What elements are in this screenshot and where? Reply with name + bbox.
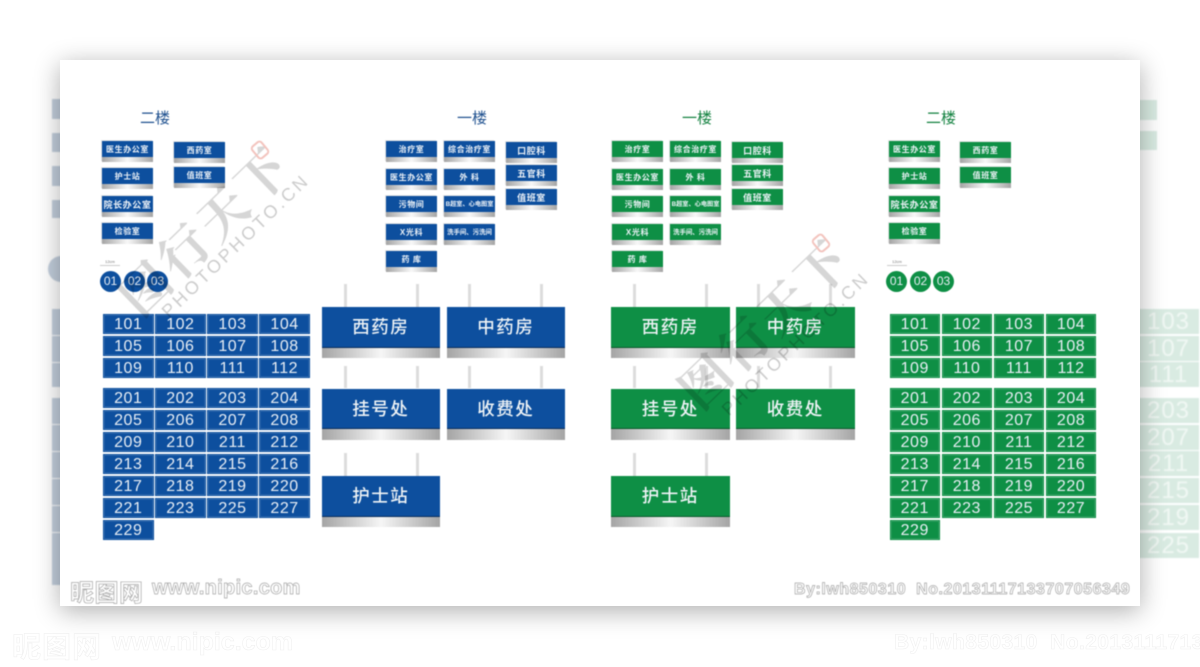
sign: 外科	[670, 169, 721, 190]
blue room numbers 101-112: 101	[114, 316, 142, 333]
panel: green second floor door signs	[888, 140, 1012, 244]
hanging sign: 护士站: 护士站	[642, 486, 699, 506]
watermark: nipic logo: www.nipic.com	[152, 577, 301, 599]
sign: B超室、心电图室	[670, 196, 721, 217]
sign: B超室、心电图室	[444, 196, 495, 217]
sign: 污物间	[386, 196, 437, 217]
sign: 医生办公室	[612, 169, 663, 190]
blue room numbers 201-229: 218	[166, 478, 194, 495]
green room numbers 101-112: 104	[1057, 316, 1085, 333]
green room numbers 201-229: 206	[953, 412, 981, 429]
green room numbers 201-229: 223	[953, 500, 981, 517]
sign: 医生办公室: 医生办公室	[390, 173, 433, 182]
badge 01: 01	[104, 274, 117, 288]
blue room numbers 201-229: 203	[218, 390, 247, 407]
blue number badges	[99, 270, 169, 293]
green room numbers 201-229: 219	[1005, 478, 1033, 495]
blue room numbers 101-112: 111	[220, 360, 245, 377]
blue room numbers 201-229	[102, 387, 311, 541]
sign: 综合治疗室: 综合治疗室	[448, 145, 491, 154]
blue room numbers 201-229: 210	[166, 434, 194, 451]
sign: 值班室: 值班室	[517, 193, 546, 203]
sign: 污物间	[612, 196, 663, 217]
sign: X光科: X光科	[400, 228, 423, 237]
sign: X光科: X光科	[626, 228, 649, 237]
heading: blue first floor: 一楼	[457, 110, 487, 127]
blue room numbers 101-112: 112	[271, 360, 298, 377]
blue room numbers 201-229: 205	[114, 412, 142, 429]
badge 03: 03	[151, 274, 164, 288]
green room numbers 201-229: 218	[953, 478, 981, 495]
heading: green first floor: 一楼	[682, 110, 712, 127]
sign: 检验室: 检验室	[902, 227, 927, 236]
sign: 五官科	[506, 165, 557, 186]
green room numbers 201-229: 208	[1057, 412, 1085, 429]
blue room numbers 201-229: 201	[114, 390, 142, 407]
blue room numbers 101-112: 106	[166, 338, 194, 355]
sign: 综合治疗室	[444, 141, 495, 162]
sign: 院长办公室: 院长办公室	[890, 200, 938, 210]
blue room numbers 201-229: 209	[114, 434, 142, 451]
badge 02: 02	[914, 274, 927, 288]
sign: 洗手间、污洗间: 洗手间、污洗间	[673, 229, 718, 236]
blue room numbers 101-112: 104	[270, 316, 299, 333]
green room numbers 201-229: 212	[1057, 434, 1085, 451]
green room numbers 101-112: 101	[901, 316, 929, 333]
hanging sign: 西药房: 西药房	[642, 317, 699, 337]
sign: 口腔科	[732, 142, 783, 163]
green room numbers 201-229: 217	[901, 478, 929, 495]
sign: 护士站	[102, 168, 153, 189]
green room numbers 201-229: 209	[901, 434, 929, 451]
blue room numbers 201-229: 211	[219, 434, 246, 451]
green room numbers 201-229: 229	[901, 522, 929, 539]
watermark: left url: PHOTOPHOTO.CN	[158, 170, 314, 321]
green room numbers 101-112: 103	[1005, 316, 1033, 333]
green room numbers 201-229: 205	[901, 412, 929, 429]
panel: green hanging signs	[610, 284, 856, 528]
hanging sign: 中药房: 中药房	[477, 317, 534, 337]
size dimension: blue 12cm	[100, 259, 120, 266]
blue room numbers 101-112	[102, 313, 311, 379]
watermark: nipic logo: 昵图网	[70, 580, 144, 607]
green room numbers 101-112: 108	[1057, 338, 1085, 355]
blue room numbers 201-229: 204	[270, 390, 299, 407]
blue room numbers 101-112: 107	[218, 338, 247, 355]
hanging sign: 收费处	[735, 388, 856, 440]
green room numbers 101-112: 111	[1006, 360, 1032, 377]
hanging sign: 收费处	[446, 388, 566, 440]
panel: white board	[60, 60, 1140, 606]
badge 01	[886, 271, 907, 292]
green room numbers 201-229: 213	[901, 456, 929, 473]
hanging sign: 挂号处	[321, 388, 441, 440]
blue room numbers 101-112: 110	[167, 360, 194, 377]
sign: 治疗室	[386, 141, 437, 162]
badge 03: 03	[937, 274, 950, 288]
hanging sign: 收费处: 收费处	[477, 398, 534, 418]
blue room numbers 201-229: 219	[218, 478, 247, 495]
sign: 医生办公室: 医生办公室	[893, 145, 936, 154]
badge 02	[124, 271, 145, 292]
sign: B超室、心电图室: B超室、心电图室	[672, 201, 719, 208]
sign: 西药室: 西药室	[973, 146, 998, 155]
green room numbers 201-229: 215	[1005, 456, 1033, 473]
hanging sign: 护士站	[321, 475, 441, 528]
sign: 口腔科: 口腔科	[517, 146, 546, 156]
hanging sign: 挂号处: 挂号处	[642, 398, 699, 418]
badge 02: 02	[128, 274, 141, 288]
heading: green second floor: 二楼	[926, 110, 956, 127]
green room numbers 101-112	[889, 313, 1097, 379]
sign: 综合治疗室: 综合治疗室	[674, 145, 717, 154]
sign: 护士站: 护士站	[115, 172, 140, 181]
background ghost: blurred green signs at right edge: 111	[1149, 361, 1188, 388]
sign: 检验室	[102, 223, 153, 244]
sign: 治疗室	[612, 141, 663, 162]
green room numbers 101-112: 102	[953, 316, 981, 333]
green room numbers 101-112: 107	[1005, 338, 1033, 355]
watermark: left brush lettering: 图行天下	[100, 128, 306, 330]
badge 03	[147, 271, 168, 292]
badge 02	[910, 271, 931, 292]
green room numbers 101-112: 105	[901, 338, 929, 355]
watermark: left seal	[249, 139, 271, 161]
sign: 院长办公室: 院长办公室	[103, 200, 152, 210]
blue room numbers 101-112: 108	[270, 338, 299, 355]
hanging sign: 西药房: 西药房	[352, 317, 409, 337]
sign: 检验室	[889, 223, 940, 244]
background ghost: blurred green signs at right edge: 203	[1147, 397, 1190, 424]
green number badges	[885, 270, 955, 293]
background ghost: blurred green signs at right edge: 215	[1147, 477, 1190, 504]
background ghost: blurred green signs at right edge	[1140, 100, 1200, 559]
sign: 值班室	[732, 189, 783, 210]
sign: 药库	[386, 251, 437, 272]
blue room numbers 101-112: 105	[114, 338, 142, 355]
hanging sign: 西药房	[610, 306, 731, 358]
green room numbers 201-229: 202	[953, 390, 981, 407]
sign: X光科	[386, 224, 437, 245]
sign: 值班室: 值班室	[187, 171, 212, 180]
blue room numbers 201-229: 221	[114, 500, 142, 517]
background ghost: blurred green signs at right edge: 107	[1147, 335, 1190, 362]
sign: 治疗室: 治疗室	[625, 145, 650, 154]
sign: 药库: 药 库	[401, 255, 422, 264]
green room numbers 201-229: 210	[953, 434, 981, 451]
size dimension: green 12cm	[887, 259, 907, 266]
sign: 综合治疗室	[670, 141, 721, 162]
sign: 药库	[612, 251, 663, 272]
sign: 医生办公室: 医生办公室	[106, 145, 149, 154]
sign: 五官科: 五官科	[517, 169, 546, 179]
green room numbers 201-229: 207	[1005, 412, 1033, 429]
sign: 西药室: 西药室	[187, 146, 212, 155]
watermark: nipic logo	[70, 577, 301, 607]
sign: 值班室	[174, 167, 225, 188]
green room numbers 201-229: 211	[1005, 434, 1032, 451]
sign: 医生办公室	[102, 141, 153, 162]
blue room numbers 201-229: 208	[270, 412, 299, 429]
blue room numbers 201-229: 214	[166, 456, 194, 473]
green room numbers 101-112: 109	[901, 360, 929, 377]
sign: 外科: 外 科	[459, 173, 480, 182]
badge 01: 01	[890, 274, 903, 288]
sign: 院长办公室	[102, 196, 153, 217]
size dimension: green 12cm: 12cm	[892, 259, 902, 264]
sign: 治疗室: 治疗室	[399, 145, 424, 154]
hanging sign: 西药房	[321, 306, 441, 358]
sign: 外科: 外 科	[685, 173, 706, 182]
sign: 院长办公室	[889, 196, 940, 217]
sign: 检验室: 检验室	[115, 227, 140, 236]
sign: 外科	[444, 169, 495, 190]
blue room numbers 201-229: 215	[218, 456, 247, 473]
green room numbers 201-229: 201	[901, 390, 929, 407]
blue room numbers 201-229: 207	[218, 412, 247, 429]
hanging sign: 挂号处: 挂号处	[352, 398, 409, 418]
sign: 值班室: 值班室	[973, 171, 998, 180]
blue room numbers 201-229: 225	[218, 500, 247, 517]
sign: 五官科	[732, 165, 783, 186]
hanging sign: 中药房: 中药房	[767, 317, 824, 337]
blue room numbers 201-229: 227	[270, 500, 299, 517]
panel: green first floor door signs	[611, 140, 784, 272]
watermark: right seal	[810, 232, 832, 254]
green room numbers 101-112: 112	[1058, 360, 1085, 377]
green room numbers 201-229: 227	[1057, 500, 1085, 517]
background ghost: blurred green signs at right edge: 207	[1147, 424, 1190, 451]
sign: 护士站	[889, 168, 940, 189]
hanging sign: 护士站: 护士站	[352, 486, 409, 506]
sign: 五官科: 五官科	[743, 169, 772, 179]
green room numbers 201-229: 203	[1005, 390, 1033, 407]
sign: 西药室	[174, 142, 225, 163]
green room numbers 201-229: 221	[901, 500, 929, 517]
background ghost watermark: nipic logo: www.nipic.com	[112, 628, 293, 656]
hanging sign: 护士站	[610, 475, 731, 528]
watermark: author and image number: By:lwh850310 No.20131117133707056349	[794, 581, 1130, 598]
sign: 值班室: 值班室	[743, 193, 772, 203]
blue room numbers 201-229: 217	[114, 478, 142, 495]
background ghost: blurred blue signs at left edge	[47, 98, 60, 586]
sign: 口腔科	[506, 142, 557, 163]
hanging sign: 收费处: 收费处	[767, 398, 824, 418]
hanging sign: 挂号处	[610, 388, 731, 440]
heading: blue second floor: 二楼	[140, 110, 170, 127]
sign: 医生办公室: 医生办公室	[616, 173, 659, 182]
panel: blue second floor door signs	[101, 140, 226, 244]
panel: blue first floor door signs	[385, 140, 558, 272]
blue room numbers 201-229: 216	[270, 456, 299, 473]
sign: B超室、心电图室: B超室、心电图室	[446, 201, 493, 208]
sign: 洗手间、污洗间	[670, 224, 721, 245]
sign: 污物间: 污物间	[625, 200, 650, 209]
blue room numbers 101-112: 103	[218, 316, 247, 333]
blue room numbers 201-229: 223	[166, 500, 194, 517]
background ghost watermark: nipic logo: 昵图网	[12, 632, 102, 664]
blue room numbers 201-229: 202	[166, 390, 194, 407]
badge 03	[933, 271, 954, 292]
sign: 护士站: 护士站	[902, 172, 927, 181]
green room numbers 201-229: 225	[1005, 500, 1033, 517]
sign: 洗手间、污洗间	[444, 224, 495, 245]
blue room numbers 101-112: 109	[114, 360, 142, 377]
blue room numbers 101-112: 102	[166, 316, 194, 333]
green room numbers 101-112: 106	[953, 338, 981, 355]
blue room numbers 201-229: 212	[270, 434, 299, 451]
sign: X光科	[612, 224, 663, 245]
watermark: right url: PHOTOPHOTO.CN	[718, 268, 874, 419]
green room numbers 201-229: 216	[1057, 456, 1085, 473]
sign: 医生办公室	[386, 169, 437, 190]
watermark: right brush lettering: 图行天下	[660, 221, 866, 423]
green room numbers 201-229: 214	[953, 456, 981, 473]
background ghost: blurred green signs at right edge: 225	[1147, 532, 1190, 559]
hanging sign: 中药房	[735, 306, 856, 358]
blue room numbers 201-229: 220	[270, 478, 299, 495]
sign: 药库: 药 库	[627, 255, 648, 264]
blue room numbers 201-229: 213	[114, 456, 142, 473]
green room numbers 101-112: 110	[953, 360, 980, 377]
blue room numbers 201-229: 206	[166, 412, 194, 429]
sign: 医生办公室	[889, 141, 940, 162]
size dimension: blue 12cm: 12cm	[105, 259, 115, 264]
sign: 西药室	[960, 142, 1011, 163]
hanging sign: 中药房	[446, 306, 566, 358]
green room numbers 201-229: 204	[1057, 390, 1085, 407]
green room numbers 201-229	[889, 387, 1097, 541]
blue room numbers 201-229: 229	[114, 522, 142, 539]
background ghost: blurred green signs at right edge: 103	[1147, 308, 1190, 335]
sign: 污物间: 污物间	[399, 200, 424, 209]
sign: 值班室	[960, 167, 1011, 188]
background ghost: blurred green signs at right edge: 211	[1148, 450, 1189, 477]
background ghost watermark: nipic logo	[12, 628, 293, 664]
green room numbers 201-229: 220	[1057, 478, 1085, 495]
badge 01	[100, 271, 121, 292]
sign: 洗手间、污洗间: 洗手间、污洗间	[447, 229, 492, 236]
sign: 口腔科: 口腔科	[743, 146, 772, 156]
panel: blue hanging signs	[321, 284, 566, 528]
background ghost: blurred green signs at right edge: 219	[1147, 504, 1190, 531]
sign: 值班室	[506, 189, 557, 210]
